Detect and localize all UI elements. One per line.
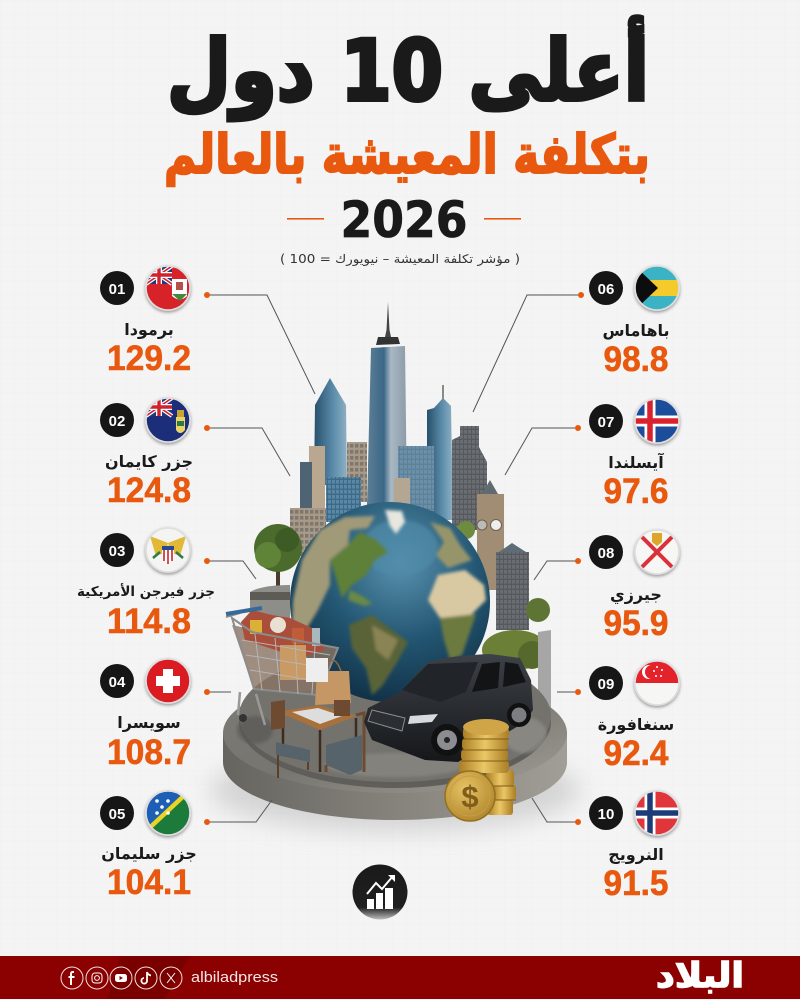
item 03: US Virgin Islands: 03 [109, 543, 125, 560]
item 01: Bermuda: 01 [109, 281, 125, 298]
year: 2026 [340, 191, 468, 249]
item 10: Norway: 10 [598, 806, 614, 823]
item 09: Singapore: 92.4 [604, 734, 669, 773]
item 07: Iceland [589, 399, 679, 511]
item 09: Singapore [589, 661, 679, 773]
item 05: Solomon Islands: 104.1 [107, 863, 191, 902]
item 01: Bermuda [100, 266, 191, 378]
item 03: US Virgin Islands [77, 528, 215, 641]
footer bar [0, 956, 800, 999]
connector lines [204, 292, 584, 825]
dining table [271, 700, 364, 778]
skyscrapers [290, 302, 529, 630]
gold coins: $ [461, 779, 479, 814]
gold coins [445, 719, 516, 821]
item 06: Bahamas [589, 266, 679, 379]
handle: albiladpress [191, 969, 278, 986]
illustration: city, globe and platform [210, 302, 580, 832]
back walls [250, 585, 290, 640]
item 10: Norway: النرويج [608, 845, 664, 864]
black SUV [364, 654, 533, 762]
index note: ( مؤشر تكلفة المعيشة – نيويورك = 100 ) [280, 252, 520, 267]
item 10: Norway: 91.5 [604, 864, 668, 903]
shopping cart [226, 608, 338, 725]
paper bag [306, 658, 351, 705]
item 07: Iceland: 97.6 [604, 472, 668, 511]
item 04: Switzerland [100, 659, 191, 772]
item 04: Switzerland: 108.7 [107, 733, 191, 772]
item 05: Solomon Islands: 05 [109, 806, 125, 823]
item 01: Bermuda: برمودا [124, 320, 174, 339]
item 04: Switzerland: 04 [109, 674, 126, 691]
item 02: Cayman Islands: 02 [109, 413, 125, 430]
item 02: Cayman Islands: 124.8 [107, 471, 191, 510]
platform [223, 650, 567, 820]
globe [290, 502, 490, 702]
item 06: Bahamas: باهاماس [602, 321, 670, 340]
item 06: Bahamas: 98.8 [604, 340, 668, 379]
item 07: Iceland: آيسلندا [608, 452, 664, 472]
item 09: Singapore: 09 [598, 676, 614, 693]
title: أعلى 10 دول [167, 16, 649, 121]
item 08: Jersey: جيرزي [610, 585, 662, 605]
item 08: Jersey: 08 [598, 545, 614, 562]
item 02: Cayman Islands: جزر كايمان [105, 452, 193, 471]
item 02: Cayman Islands [100, 398, 193, 510]
social icons [61, 967, 182, 989]
item 08: Jersey: 95.9 [604, 604, 668, 643]
trees [254, 521, 550, 670]
item 10: Norway [589, 791, 679, 903]
item 03: US Virgin Islands: جزر فيرجن الأمريكية [77, 583, 215, 600]
subtitle: بتكلفة المعيشة بالعالم [164, 123, 650, 186]
icon: growth chart [352, 864, 408, 920]
item 06: Bahamas: 06 [598, 281, 614, 298]
item 07: Iceland: 07 [598, 414, 614, 431]
item 09: Singapore: سنغافورة [598, 715, 674, 734]
item 01: Bermuda: 129.2 [107, 339, 191, 378]
item 05: Solomon Islands: جزر سليمان [101, 844, 197, 863]
logo: البلاد [656, 956, 744, 996]
item 05: Solomon Islands [100, 791, 197, 902]
item 08: Jersey [589, 530, 679, 643]
item 04: Switzerland: سويسرا [117, 713, 181, 732]
item 03: US Virgin Islands: 114.8 [107, 602, 191, 641]
